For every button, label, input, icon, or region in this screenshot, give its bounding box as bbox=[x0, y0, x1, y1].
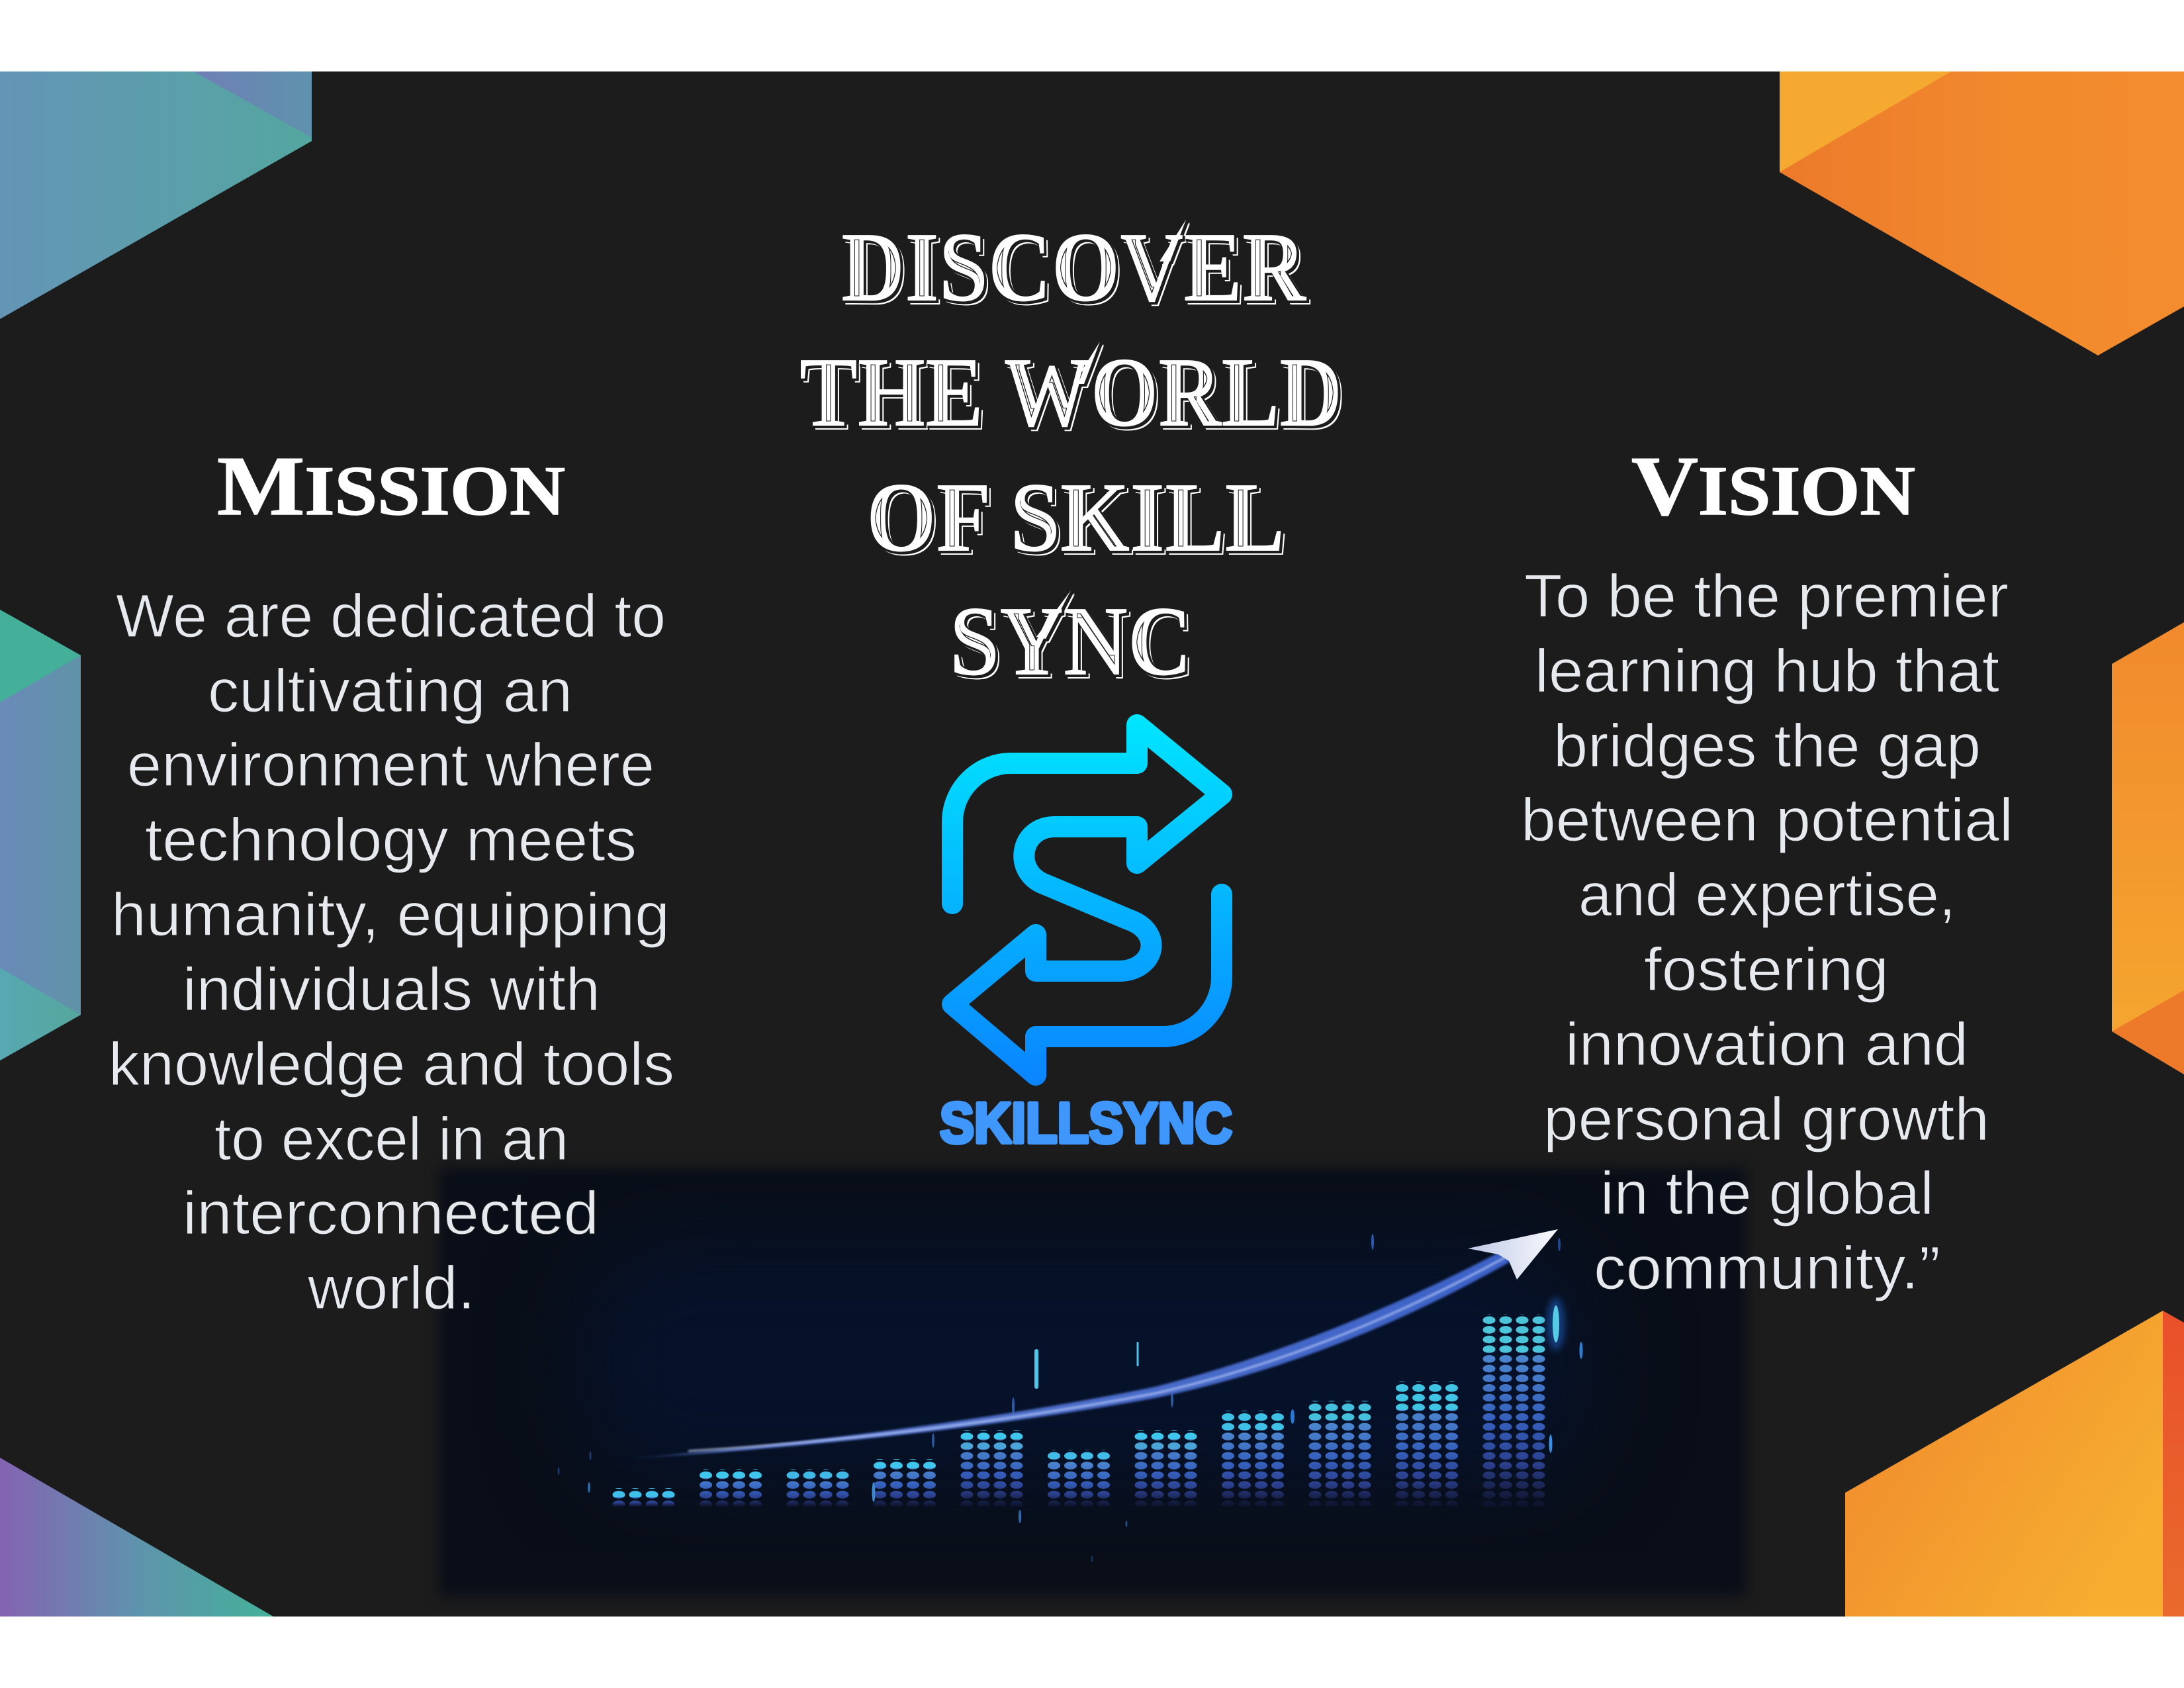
text block: mission statement: environment where bbox=[127, 731, 655, 799]
text block: mission statement: We are dedicated to bbox=[116, 583, 666, 650]
logo: Skill Sync arrows bbox=[940, 725, 1232, 1155]
title: THE WORLD bbox=[799, 336, 1342, 447]
hexagon: bottom left purple-green bbox=[0, 1458, 273, 1617]
text block: vision statement: learning hub that bbox=[1535, 637, 1999, 705]
text block: mission statement bbox=[109, 583, 674, 1322]
text block: vision statement: personal growth bbox=[1543, 1086, 1989, 1153]
text block: vision statement: community.” bbox=[1594, 1235, 1940, 1302]
title: DISCOVER bbox=[841, 211, 1307, 322]
logo arrow S mark bbox=[952, 725, 1222, 1075]
title: OF SKILL bbox=[866, 461, 1285, 573]
text block: vision statement: innovation and bbox=[1565, 1011, 1968, 1078]
chart image: rising bars with arrow bbox=[439, 1168, 1746, 1597]
text block: vision statement bbox=[1521, 563, 2013, 1302]
text block: mission statement: world. bbox=[307, 1254, 475, 1322]
text block: vision statement: fostering bbox=[1644, 936, 1889, 1004]
hexagon: left middle blue-green bbox=[0, 610, 81, 1060]
heading: Vision: VISION bbox=[1631, 439, 1915, 533]
hexagon: right middle orange bbox=[2112, 622, 2184, 1074]
rising arrow bbox=[615, 1229, 1558, 1460]
text block: mission statement: humanity, equipping bbox=[111, 881, 670, 949]
text block: vision statement: To be the premier bbox=[1524, 563, 2009, 630]
text block: mission statement: to excel in an bbox=[214, 1105, 569, 1173]
hexagon: top right orange bbox=[1780, 71, 2184, 355]
text block: mission statement: individuals with bbox=[183, 956, 600, 1023]
title: SYNC bbox=[950, 585, 1192, 696]
light streaks bbox=[557, 1234, 1583, 1562]
text block: mission statement: cultivating an bbox=[208, 657, 572, 725]
heading: Mission: MISSION bbox=[217, 439, 565, 533]
dot-matrix bars bbox=[611, 1314, 1547, 1507]
title bbox=[799, 211, 1342, 696]
hexagon: top left teal bbox=[0, 71, 312, 319]
text block: mission statement: knowledge and tools bbox=[109, 1031, 674, 1098]
logo wordmark: SKILLSYNC bbox=[940, 1092, 1232, 1155]
text block: vision statement: in the global bbox=[1600, 1160, 1934, 1227]
text block: vision statement: and expertise, bbox=[1578, 861, 1956, 929]
hexagon: bottom right orange and red bbox=[1845, 1311, 2184, 1617]
text block: mission statement: technology meets bbox=[145, 806, 637, 874]
text block: mission statement: interconnected bbox=[183, 1180, 599, 1247]
text block: vision statement: between potential bbox=[1521, 786, 2013, 854]
text block: vision statement: bridges the gap bbox=[1553, 712, 1981, 780]
chart backdrop bbox=[439, 1168, 1746, 1597]
